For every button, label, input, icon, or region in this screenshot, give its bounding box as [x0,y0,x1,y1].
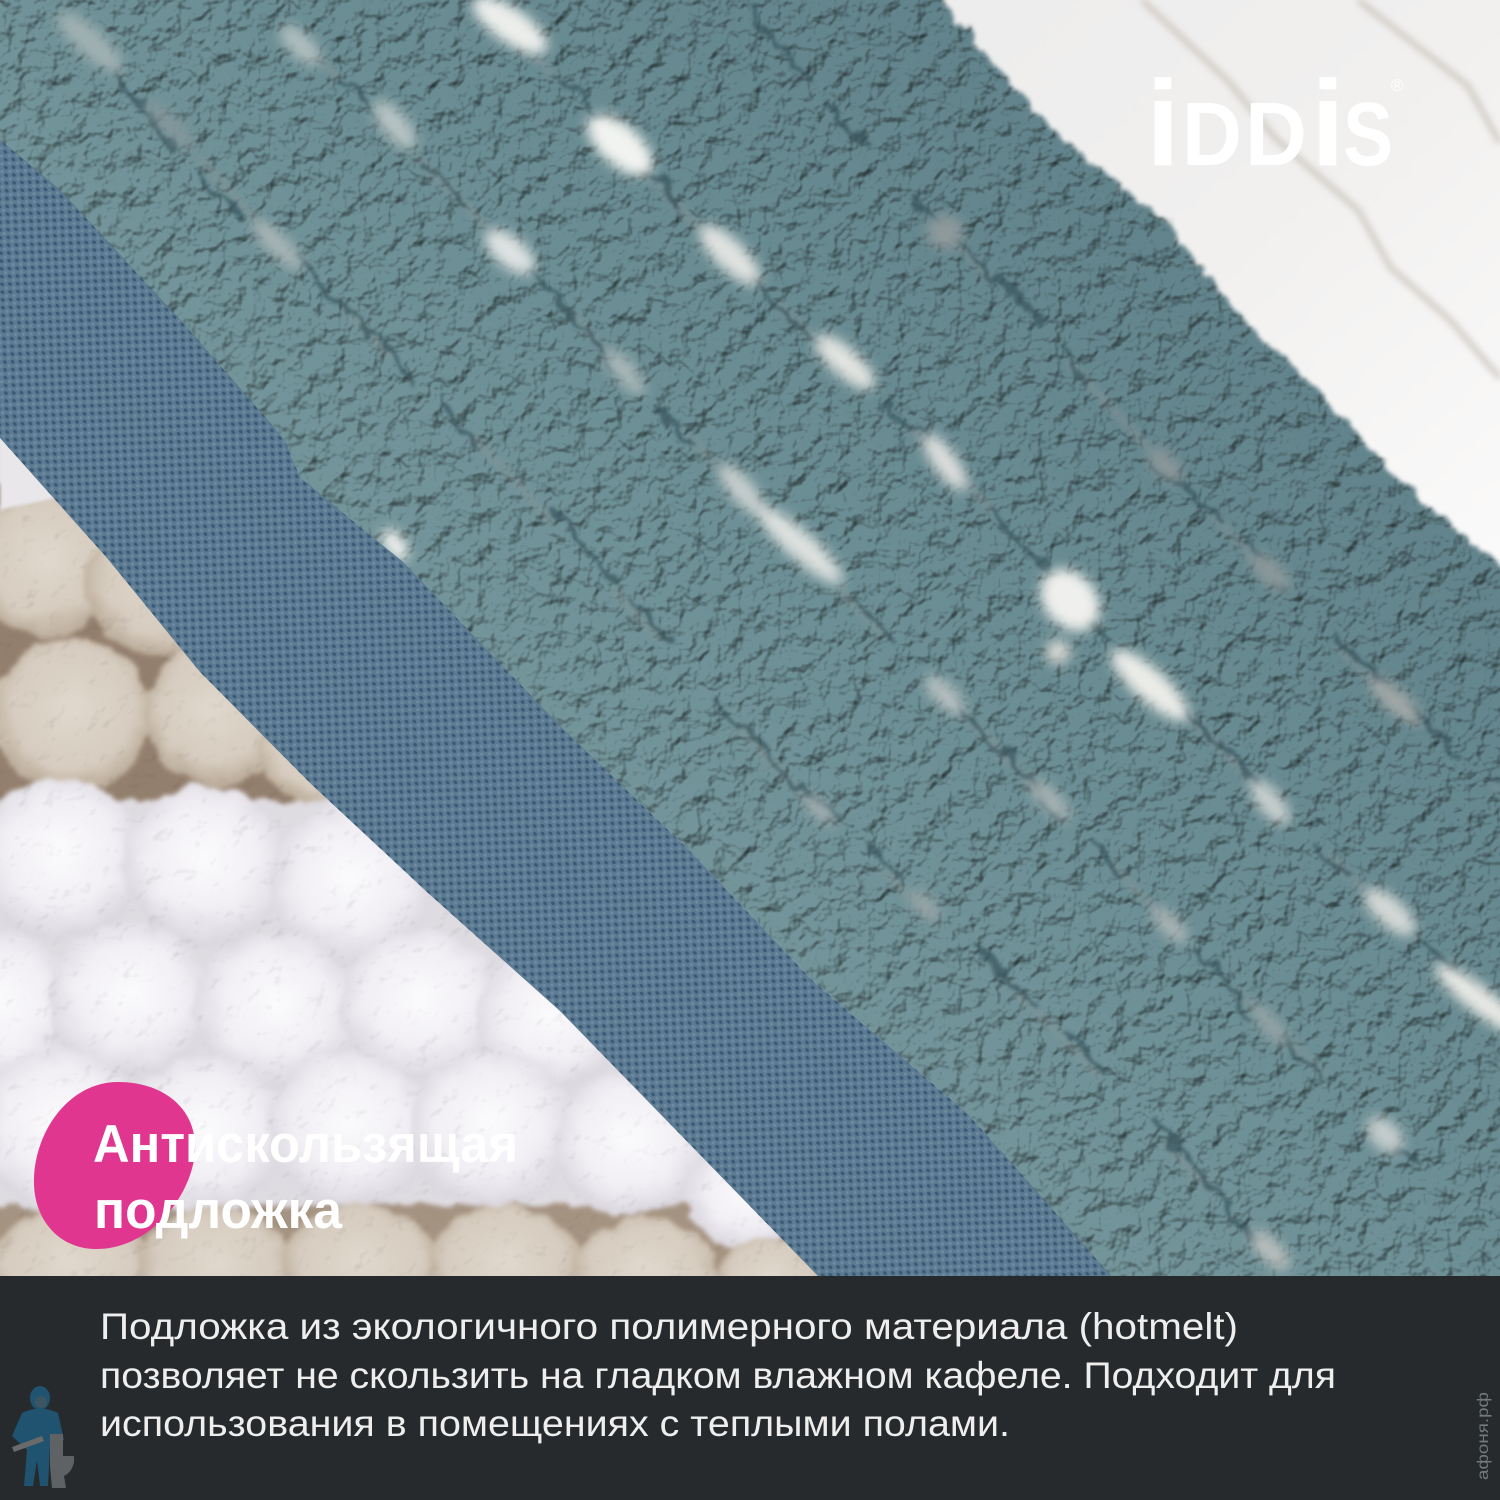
description text: Подложка из экологичного полимерного материала (hotmelt) [100,1306,1238,1347]
top-right white mat section [925,0,1500,600]
bottom dark description band [0,1276,1500,1500]
logo: iDDiS: ® [1391,76,1404,95]
logo: iDDiS: i [1311,55,1345,191]
logo: iDDiS: D [1182,85,1242,185]
logo: iDDiS: S [1343,85,1393,185]
icon: plumber with toilet [12,1386,74,1488]
watermark site name: афоня.рф [1475,1392,1492,1480]
description text [100,1306,1336,1444]
logo: iDDiS [1146,55,1404,191]
description text: позволяет не скользить на гладком влажном кафеле. Подходит для [100,1355,1336,1396]
heading [93,1115,518,1240]
heading: подложка [94,1181,343,1240]
description text: использования в помещениях с теплыми полами. [100,1403,1010,1444]
grey thread gaps between the tufts [116,54,1500,1184]
logo: iDDiS: i [1146,55,1180,191]
heading: Антискользящая [93,1115,518,1174]
lower-left white and beige pompom pile [0,430,1000,1331]
pink blob accent [34,1082,195,1249]
logo: iDDiS: D [1245,85,1307,185]
dark stitching creases [120,10,1500,1250]
blue anti-slip strap [0,140,1111,1276]
